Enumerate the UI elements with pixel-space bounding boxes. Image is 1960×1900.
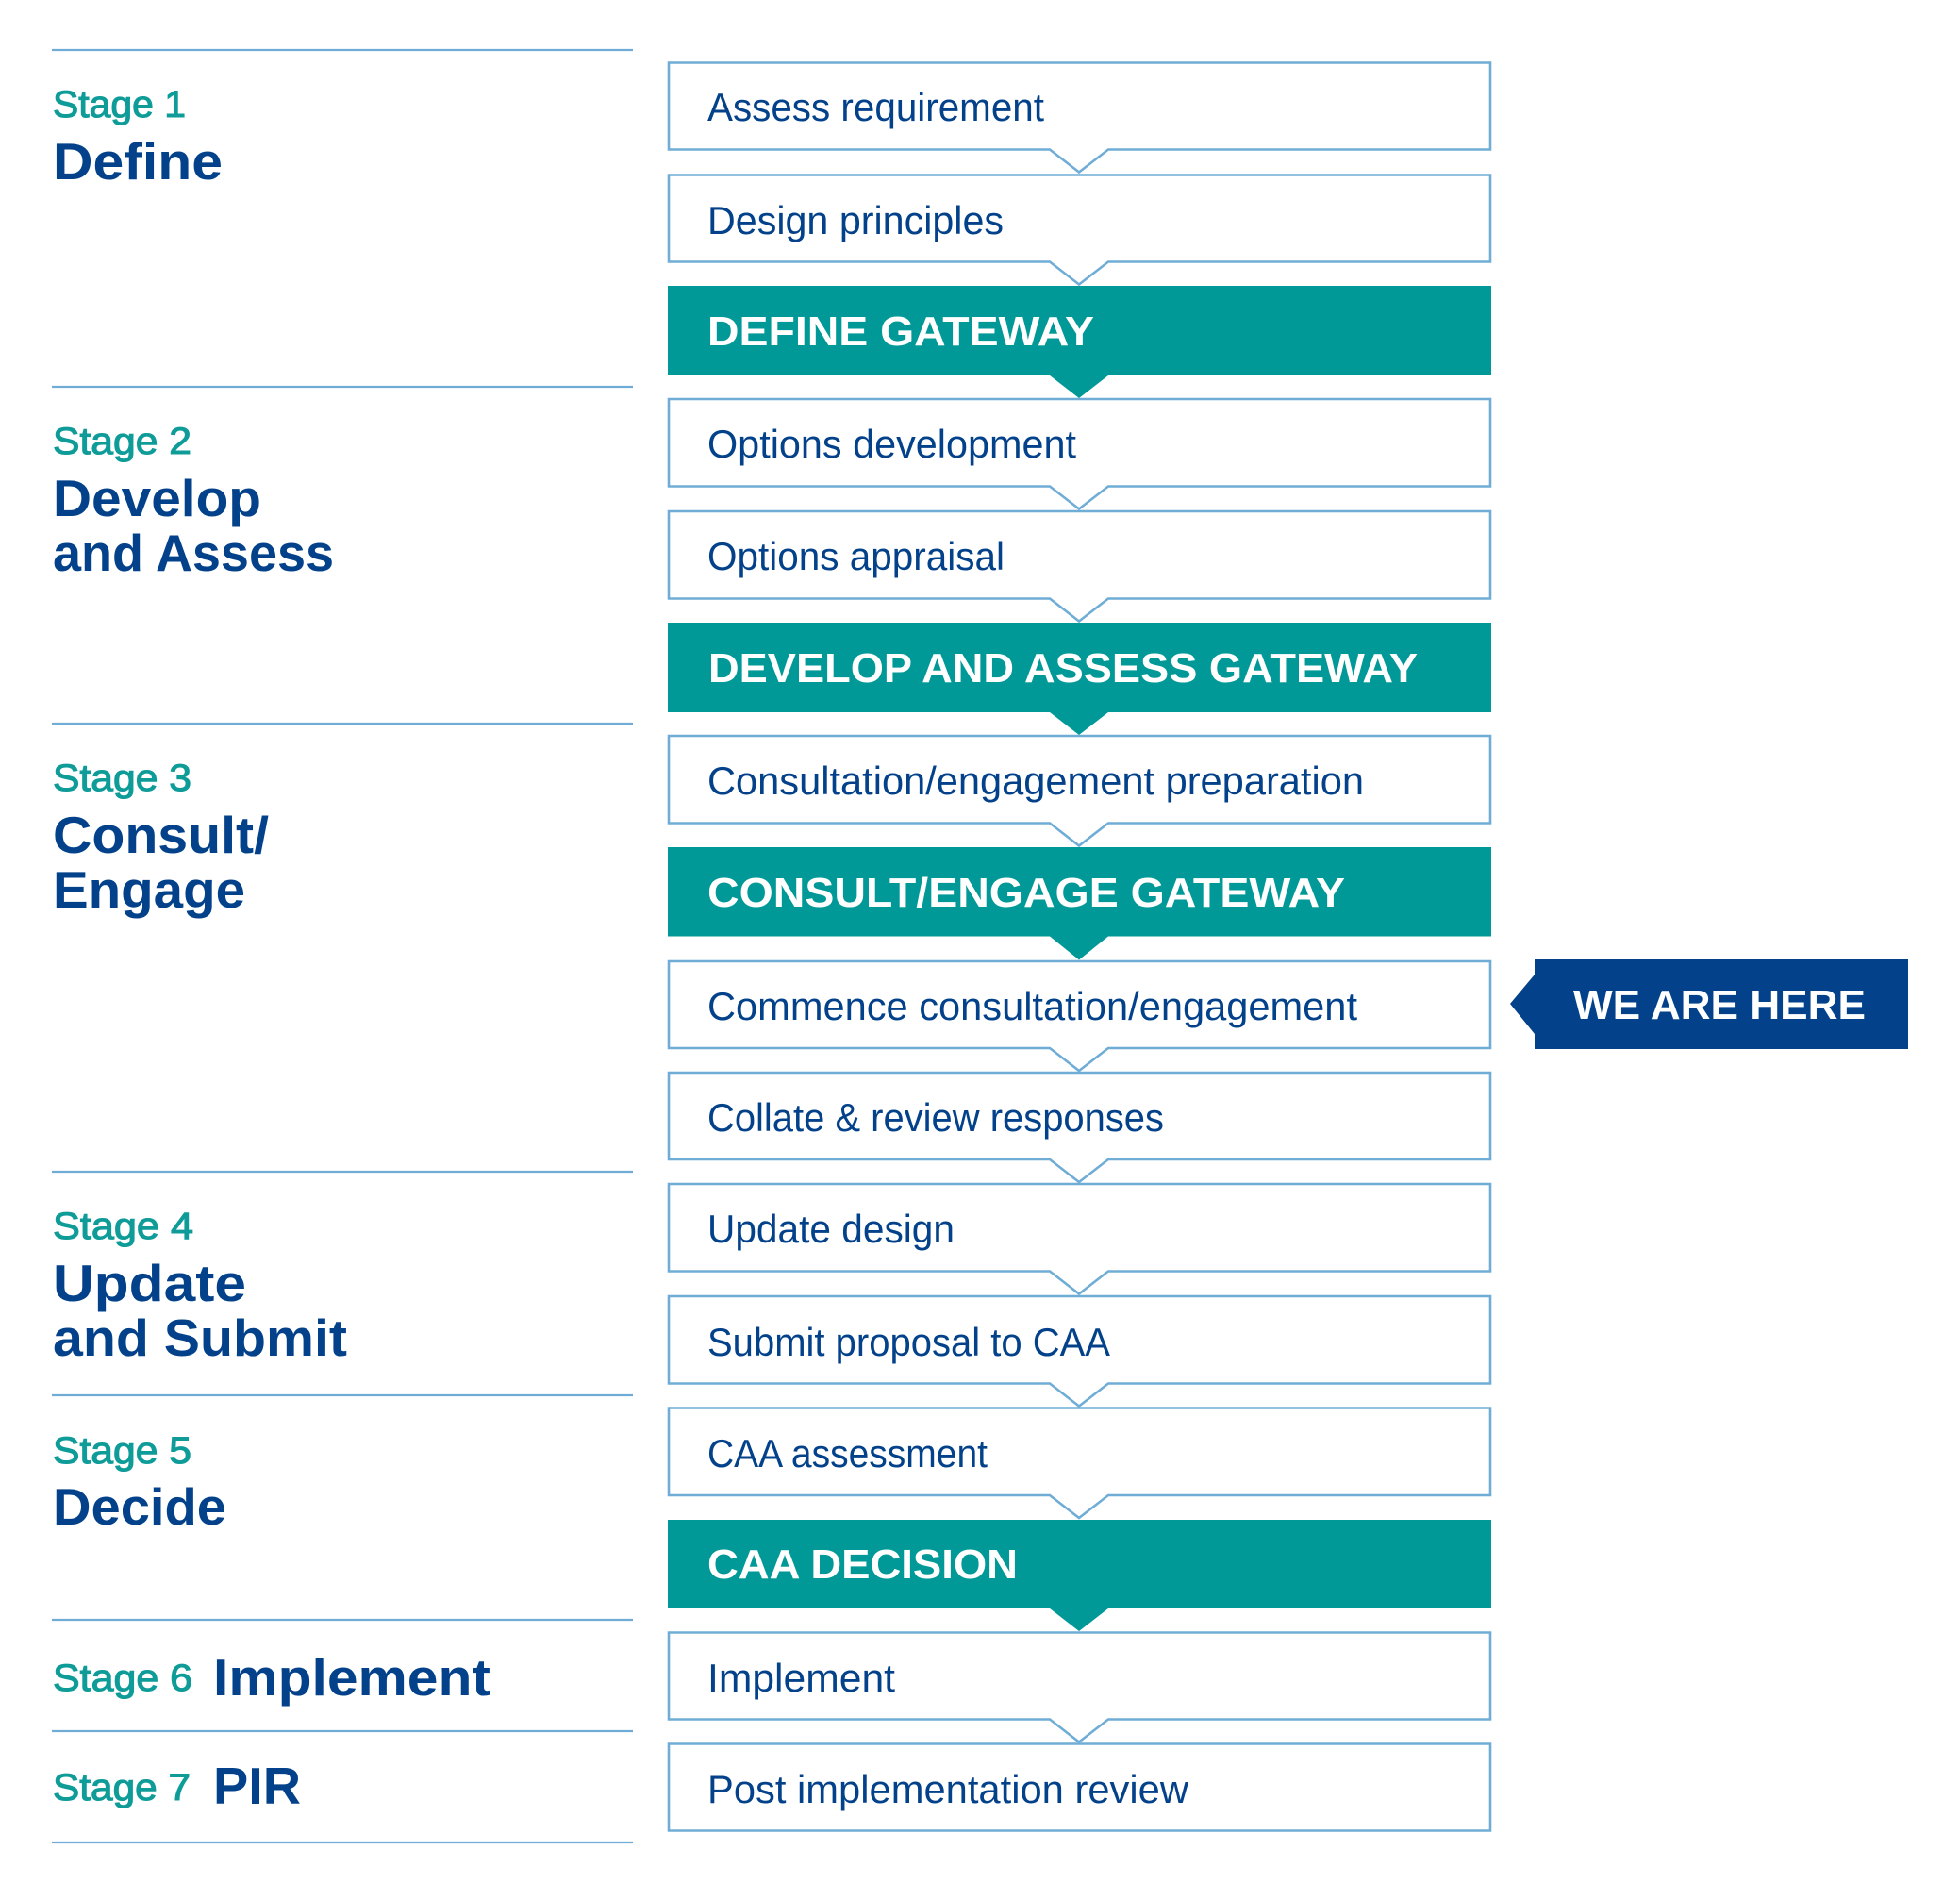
stage 6 heading: Implement: Stage 6 <box>53 1658 192 1699</box>
gateway: CAA decision: CAA DECISION <box>707 1542 1018 1588</box>
gateway: Define <box>668 286 1491 398</box>
stage 3 heading: Consult/Engage <box>53 758 269 919</box>
stage 5 heading: Decide: Decide <box>53 1477 226 1536</box>
stage 1 heading: Define: Define <box>53 132 223 191</box>
step: Collate and review responses <box>669 1073 1490 1182</box>
stage 6 heading: Implement: Implement <box>213 1648 490 1707</box>
gateway: Develop and Assess <box>668 623 1491 735</box>
step: Update design: Update design <box>707 1207 955 1251</box>
step: Implement: Implement <box>707 1656 895 1700</box>
step: Options appraisal <box>669 511 1490 621</box>
step: Update design <box>669 1184 1490 1294</box>
step: Options development <box>669 399 1490 509</box>
stage 2 heading: Develop and Assess: Stage 2 <box>53 421 191 462</box>
step: Assess requirement <box>669 62 1490 172</box>
step: Design principles <box>669 175 1490 285</box>
gateway: Consult/Engage: CONSULT/ENGAGE GATEWAY <box>707 870 1345 916</box>
gateway: Define: DEFINE GATEWAY <box>707 308 1094 355</box>
stage 4 heading: Update and Submit <box>53 1206 347 1367</box>
stage 2 heading: Develop and Assess: and Assess <box>53 524 334 582</box>
step: Options appraisal: Options appraisal <box>707 534 1005 578</box>
callout: We are here <box>1510 959 1908 1049</box>
stage 1 heading: Define <box>53 84 223 191</box>
gateway: CAA decision <box>668 1520 1491 1631</box>
stage 3 heading: Consult/Engage: Engage <box>53 860 245 919</box>
step: Implement <box>669 1632 1490 1742</box>
gateway: Develop and Assess: DEVELOP AND ASSESS GATEWAY <box>708 645 1418 692</box>
stage 7 heading: PIR: PIR <box>213 1757 301 1815</box>
stage 4 heading: Update and Submit: Stage 4 <box>53 1206 193 1247</box>
stage 7 heading: PIR <box>53 1757 301 1815</box>
step: Post implementation review <box>669 1743 1490 1830</box>
step: CAA assessment: CAA assessment <box>707 1431 988 1475</box>
step: CAA assessment <box>669 1408 1490 1518</box>
step: Design principles: Design principles <box>707 198 1004 242</box>
step: Post implementation review: Post implementation review <box>707 1767 1189 1811</box>
step: Submit proposal to CAA <box>669 1296 1490 1406</box>
stage 7 heading: PIR: Stage 7 <box>53 1767 191 1808</box>
stage 3 heading: Consult/Engage: Consult/ <box>53 806 269 864</box>
step: Commence consultation/engagement: Commence consultation/engagement <box>707 984 1357 1028</box>
stage 6 heading: Implement <box>53 1648 490 1707</box>
step: Consultation/engagement preparation <box>669 736 1490 845</box>
stage 2 heading: Develop and Assess: Develop <box>53 469 261 527</box>
stage 4 heading: Update and Submit: and Submit <box>53 1308 347 1367</box>
step: Consultation/engagement preparation: Consultation/engagement preparation <box>707 758 1364 803</box>
step: Collate and review responses: Collate & review responses <box>707 1095 1164 1140</box>
gateway: Consult/Engage <box>668 847 1491 960</box>
step: Options development: Options development <box>707 422 1076 466</box>
stage 4 heading: Update and Submit: Update <box>53 1254 246 1312</box>
stage 3 heading: Consult/Engage: Stage 3 <box>53 758 191 799</box>
step: Assess requirement: Assess requirement <box>707 85 1044 129</box>
callout: We are here: WE ARE HERE <box>1573 982 1866 1028</box>
step: Submit proposal to CAA: Submit proposal to CAA <box>707 1320 1110 1364</box>
stage 1 heading: Define: Stage 1 <box>53 84 186 125</box>
stage 5 heading: Decide: Stage 5 <box>53 1430 191 1472</box>
stage 5 heading: Decide <box>53 1430 226 1536</box>
stage 2 heading: Develop and Assess <box>53 421 334 582</box>
step: Commence consultation/engagement <box>669 961 1490 1071</box>
